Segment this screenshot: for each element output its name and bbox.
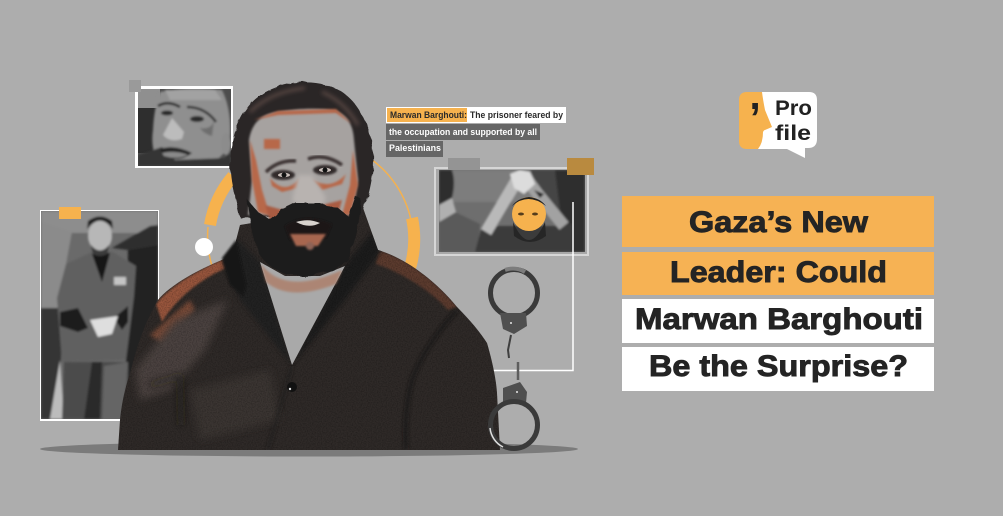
caption: prisoner description: Marwan Barghouti:	[390, 110, 467, 120]
caption: prisoner description: Palestinians	[389, 143, 441, 153]
jacket shoulder highlights	[118, 200, 503, 450]
handcuffs	[490, 269, 538, 448]
skin orange shading	[250, 109, 358, 235]
caption: prisoner description	[386, 107, 566, 157]
jacket collar lapel	[222, 240, 246, 296]
mouth	[296, 220, 320, 226]
decorative arc ring	[195, 157, 414, 268]
ground shadow	[40, 442, 578, 456]
photo: raised cuffed hands right	[435, 158, 594, 255]
nose	[292, 175, 326, 206]
beard detail	[306, 242, 314, 250]
photo: portrait top left	[129, 80, 233, 168]
thin white frame line	[493, 202, 573, 370]
logo: Profile: file	[775, 122, 811, 145]
headline line 4	[622, 347, 934, 391]
headline line 4: Be the Surprise?	[649, 350, 908, 383]
face	[248, 109, 358, 215]
headline line 1: Gaza’s New	[689, 206, 869, 239]
jacket button	[287, 382, 297, 392]
beard	[248, 196, 362, 276]
headline line 1	[622, 196, 934, 247]
hair highlights	[250, 88, 358, 125]
hair	[230, 82, 373, 218]
logo: Profile: ,	[749, 74, 761, 118]
photo: standing prisoner left	[40, 207, 159, 421]
shirt collar	[260, 262, 345, 365]
headline line 2: Leader: Could	[670, 256, 887, 289]
jacket	[118, 205, 500, 450]
logo: Profile: Pro	[775, 97, 812, 120]
logo: Profile	[739, 74, 817, 158]
headline line 3: Marwan Barghouti	[635, 303, 923, 336]
caption: prisoner description: the occupation and supported by all	[389, 127, 537, 137]
title: headline stack	[622, 196, 934, 391]
eyebrows and eyes	[266, 157, 342, 180]
headline line 3	[622, 299, 934, 343]
caption: prisoner description: The prisoner feared by	[470, 110, 563, 120]
headline line 2	[622, 252, 934, 295]
central portrait: Marwan Barghouti	[118, 82, 503, 450]
